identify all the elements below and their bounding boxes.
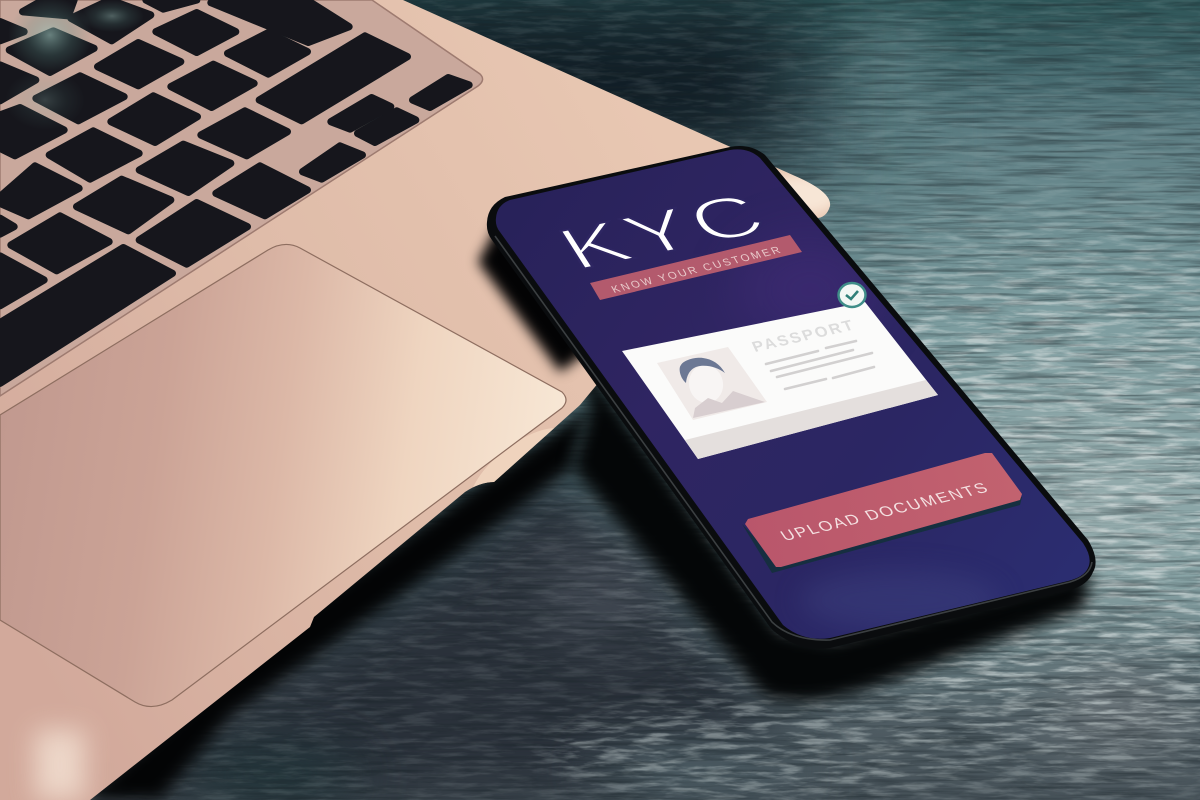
keyboard glare: [5, 0, 144, 130]
trackpad: [0, 244, 566, 707]
upload documents button: [742, 453, 1022, 573]
portrait: [657, 347, 767, 420]
passport text lines: [766, 341, 874, 389]
KYC title: KYC: [546, 181, 778, 282]
know your customer banner: [590, 235, 802, 300]
button shadow: [742, 497, 1022, 573]
phone shadow on laptop: [478, 220, 590, 372]
keyboard well: [0, 0, 483, 396]
phone screen: [496, 149, 1090, 639]
card footer band: [685, 380, 938, 459]
phone shadow on table: [540, 300, 1090, 702]
passport label: PASSPORT: [750, 318, 857, 356]
phone edge highlight: [495, 236, 1092, 640]
lower left dark table zone: [120, 460, 790, 800]
laptop: [0, 0, 840, 800]
laptop shadow on table: [80, 405, 590, 800]
know your customer banner: KNOW YOUR CUSTOMER: [609, 245, 783, 296]
laptop body: [0, 0, 830, 800]
phone body: [487, 146, 1096, 649]
keyboard keys: [0, 0, 469, 383]
upload documents button: UPLOAD DOCUMENTS: [777, 480, 991, 544]
passport card: [622, 283, 938, 459]
verified check badge: [838, 283, 866, 307]
phone: [487, 146, 1096, 649]
